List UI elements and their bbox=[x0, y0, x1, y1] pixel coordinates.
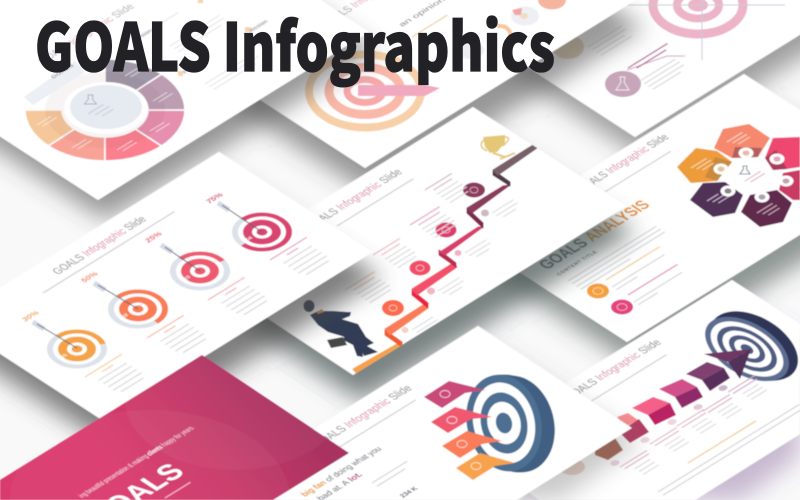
target 30 percent: 01 bbox=[60, 353, 70, 359]
donut inner shading bbox=[45, 72, 165, 148]
donut chart bbox=[25, 59, 185, 161]
slide subtitle bbox=[43, 212, 175, 293]
3D target bbox=[694, 297, 800, 395]
text blocks above stairs bbox=[345, 173, 474, 304]
list item one bbox=[587, 247, 669, 298]
panel: pink cover slide bbox=[0, 330, 349, 500]
small target with ribbon bbox=[511, 6, 539, 26]
slide title: GOALS Infographic Slide bbox=[562, 337, 665, 402]
small target bbox=[538, 0, 566, 10]
panel: big target slide bbox=[211, 0, 644, 196]
icon: cog bbox=[559, 459, 585, 475]
hexagon: purple bbox=[690, 182, 743, 217]
target 50 percent: 02 bbox=[121, 313, 131, 319]
block one bbox=[595, 435, 623, 460]
slide subtitle bbox=[590, 355, 666, 402]
text lines bbox=[412, 15, 447, 37]
orange arc bbox=[497, 26, 511, 37]
cover subtitle bbox=[165, 482, 190, 498]
businessman figure bbox=[304, 300, 378, 357]
heading: progress: Progress bbox=[182, 58, 209, 75]
decorative circles bbox=[10, 330, 345, 500]
target 30 percent: 30% bbox=[20, 309, 41, 323]
flag two bbox=[431, 407, 492, 433]
paragraph bbox=[658, 404, 800, 495]
hexagon: crimson bbox=[779, 170, 800, 200]
staircase bbox=[353, 145, 537, 375]
slide title: GOALS Infographic Slide bbox=[303, 167, 406, 231]
ribbon: goals: GOALS bbox=[50, 63, 75, 80]
ribbon: goals bbox=[24, 61, 85, 105]
big target bbox=[309, 54, 421, 128]
block two bbox=[617, 413, 649, 443]
panel: 3D target slide bbox=[207, 326, 640, 500]
centre flask icon and caption bbox=[740, 166, 765, 183]
block four bbox=[659, 379, 703, 408]
icon: flask circle bbox=[605, 71, 641, 97]
panel: arrow and blocks slide bbox=[461, 280, 800, 500]
stat figure: 234 K bbox=[399, 486, 420, 499]
slide subtitle bbox=[600, 151, 671, 195]
block three bbox=[632, 397, 676, 425]
paragraph lines bbox=[150, 12, 263, 90]
hexagon: pink bbox=[765, 137, 800, 170]
callout line bbox=[627, 56, 685, 70]
target 30 percent bbox=[20, 309, 115, 374]
target 50 percent bbox=[79, 270, 176, 334]
flag three bbox=[442, 431, 502, 458]
target 50 percent: 50% bbox=[79, 270, 100, 284]
target 25 percent: 03 bbox=[183, 275, 193, 281]
slide subtitle bbox=[338, 400, 416, 448]
block five bbox=[686, 362, 730, 391]
icon squares bbox=[178, 0, 250, 76]
hexagon icon discs bbox=[714, 148, 794, 202]
icon: trophy bbox=[481, 135, 515, 159]
tagline: ing beautiful presentation & making clients happy for years. bbox=[76, 424, 197, 499]
paragraph bbox=[568, 226, 669, 289]
panel: stairs slide bbox=[202, 107, 635, 401]
highlighted header bbox=[688, 421, 756, 463]
small icons and captions right of stairs bbox=[402, 200, 522, 336]
target 75 percent: 04 bbox=[245, 236, 255, 242]
panel: donut slide bbox=[0, 0, 376, 220]
flag one bbox=[424, 381, 485, 408]
panel: percent targets slide bbox=[0, 152, 381, 446]
column texts bbox=[609, 370, 772, 480]
target 25 percent: 25% bbox=[143, 230, 164, 244]
hexagon: orange bbox=[677, 148, 732, 183]
target 25 percent bbox=[143, 230, 238, 296]
opinion text: an opinion bbox=[396, 0, 448, 28]
panel: top-right target slide bbox=[481, 0, 800, 157]
list item two bbox=[611, 264, 686, 314]
target 75 percent: 75% bbox=[204, 191, 225, 205]
slide subtitle bbox=[337, 179, 413, 226]
slide title: GOALS Infographic Slide bbox=[50, 214, 150, 277]
grey circle bbox=[463, 44, 484, 59]
hexagon: plum bbox=[741, 190, 792, 227]
paragraph bbox=[372, 461, 412, 486]
heading: mission: Mission bbox=[247, 19, 270, 34]
target rings with crosshair bbox=[625, 0, 785, 60]
donut centre bbox=[64, 82, 148, 134]
icon: tan circle bbox=[552, 35, 584, 59]
text block beside flask circle bbox=[628, 43, 688, 89]
slide title fragment: GOALS Infographic Slide bbox=[35, 2, 137, 66]
panel: hexagon analysis slide bbox=[473, 74, 800, 366]
3D target bbox=[456, 367, 565, 480]
icon discs on stairs bbox=[382, 182, 485, 316]
heading: goals analysis: GOALS ANALYSIS bbox=[534, 197, 654, 272]
target captions bbox=[85, 237, 336, 396]
arrow bbox=[358, 85, 440, 96]
target 75 percent bbox=[204, 191, 300, 257]
content title: CONTENT TITLE bbox=[556, 250, 600, 277]
quote text: big fan of doing what you bbox=[298, 445, 384, 498]
flag four bbox=[456, 453, 515, 480]
slide title: GOALS Infographic Slide bbox=[310, 383, 416, 449]
arrow head bbox=[704, 349, 751, 379]
heading: vision: Vision bbox=[135, 28, 155, 41]
slide title: GOALS Infographic Slide bbox=[574, 132, 672, 194]
hexagon icons bbox=[718, 150, 790, 200]
hexagon: coral bbox=[714, 124, 770, 158]
segment labels bbox=[37, 66, 173, 152]
text block beside tan circle bbox=[588, 26, 635, 55]
